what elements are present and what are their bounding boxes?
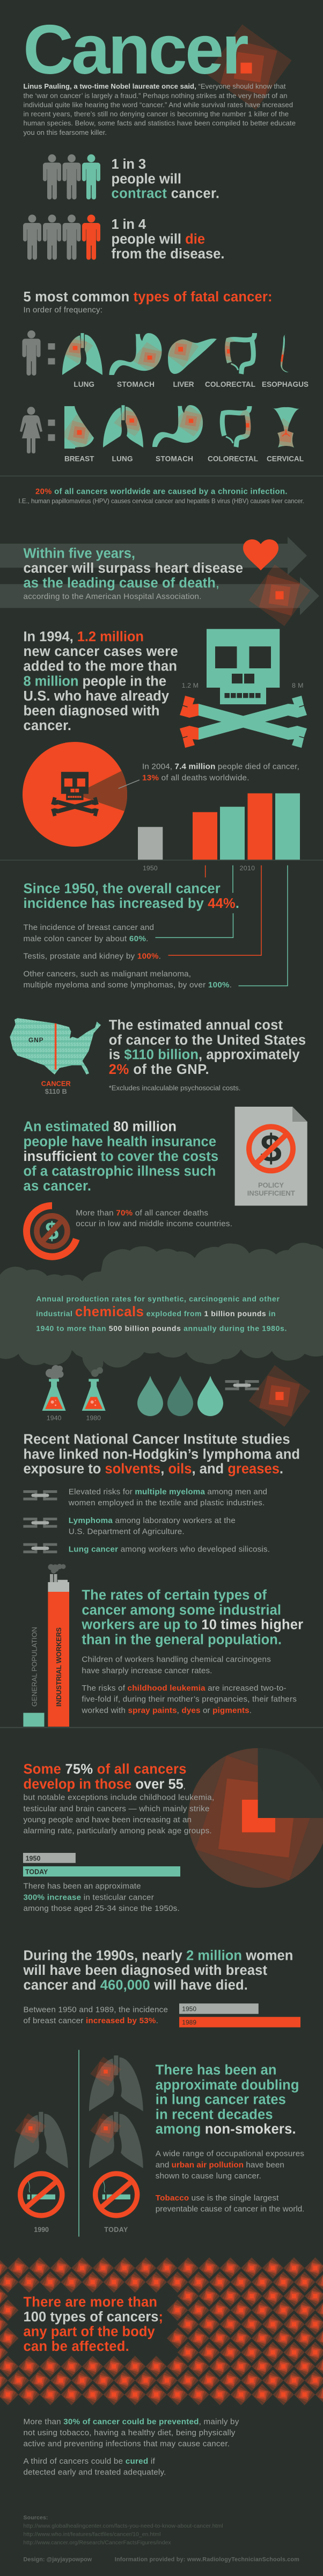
text: prevention and cure: not using tobacco, having a healthy diet, being physically [24, 2428, 236, 2437]
text: chemicals production [36, 1294, 287, 1332]
text: 1994 new cases: 8 million people in the [24, 674, 166, 689]
chart: factory bar vs general population: GENERAL POPULATION [31, 1627, 39, 1707]
icon: 70 percent ring with dollar: $ [45, 1217, 58, 1245]
text: chemicals production: Annual production rates for synthetic, carcinogenic and other [36, 1294, 280, 1303]
heading: 5 most common types [24, 290, 273, 315]
stat: 1 in 3 contract cancer: 1 in 3 [112, 157, 146, 172]
text: annual cost: is $110 billion, approximately [109, 1048, 300, 1063]
organ: female breast [64, 406, 94, 449]
list: elevated risks: Elevated risks for multiple myeloma among men and [69, 1488, 267, 1497]
sources [24, 2515, 223, 2546]
icon: insufficient policy document: POLICY [258, 1181, 284, 1189]
text: since 1950 incidence: male colon cancer by about 60%. [24, 934, 148, 943]
icon: skull and crossbones chart: 8 M [292, 682, 304, 689]
map: United States GNP: $$$$$$$$$$$$$$$$$$$$$$$$$$$$$$$$$$ [8, 1024, 105, 1030]
chart: 75 percent clock pie [182, 1746, 323, 1891]
heading: within five years: as the leading cause of death, [24, 576, 219, 591]
text: testicular increase: 300% increase in testicular cancer [24, 1893, 154, 1902]
text: since 1950 incidence: The incidence of breast cancer and [24, 923, 154, 932]
text: annual cost: *Excludes incalculable psychosocial costs. [109, 1084, 240, 1092]
text: National Cancer Institute: have linked non-Hodgkin’s lymphoma and [24, 1447, 300, 1462]
icon: flask 1940: 1940 [47, 1414, 61, 1422]
female organ labels: COLORECTAL [208, 455, 258, 463]
icon: tumor squares behind title [206, 24, 292, 110]
text: breast cancer 1990s: cancer and 460,000 will have died. [24, 1978, 248, 1993]
icon: 70 percent ring with dollar [27, 1206, 76, 1257]
stat: 1 in 3 contract cancer: people will [112, 171, 181, 186]
text: 80 million insufficient insurance: as cancer. [24, 1179, 91, 1194]
heading: 5 most common types: 5 most common types of fatal cancer: [24, 290, 273, 305]
arrow: lower band [0, 577, 319, 615]
female organ labels: LUNG [112, 455, 133, 463]
text: prevention and cure [24, 2417, 239, 2477]
text: 80 million insufficient insurance [24, 1120, 218, 1194]
icon: man [23, 330, 41, 376]
text: 75 percent over 55: young people and have been increasing at an [24, 1815, 192, 1824]
text: lung cancer doubling: preventable cause of cancer in the world. [156, 2205, 304, 2214]
text: National Cancer Institute [24, 1432, 300, 1477]
bar chart: incidence 1950 to 2010 [0, 793, 323, 872]
icon: lungs 1990 [14, 2112, 68, 2168]
male organ labels: STOMACH [117, 380, 155, 388]
sources: http://www.globalhealingcenter.com/facts-you-need-to-know-about-cancer.html [24, 2523, 223, 2529]
icon: flask 1980 [82, 1367, 106, 1422]
list: elevated risks: U.S. Department of Agriculture. [69, 1527, 185, 1536]
icon: tumor [249, 1365, 310, 1427]
callout: chronic infection [18, 487, 304, 505]
credits: Design: @jayjaypowpow [24, 2556, 92, 2563]
stat: 1 in 4 die: people will die [112, 232, 205, 247]
icon: 1 in 4 people [23, 215, 100, 260]
map: United States GNP: $$$$$$$$$$$$$$$$$$$$$$$$$$$$$$$$$$ [8, 1018, 105, 1024]
text: since 1950 incidence: Since 1950, the overall cancer [24, 881, 221, 896]
credits [24, 2556, 299, 2563]
text: lung cancer doubling: A wide range of occupational exposures [156, 2149, 304, 2158]
text: 2004 deaths: 13% of all deaths worldwide. [142, 773, 249, 782]
icon: two squares male [48, 343, 55, 364]
text: 80 million insufficient insurance: people have health insurance [24, 1134, 216, 1149]
text: lung cancer doubling: in lung cancer rates [156, 2092, 286, 2108]
text: lung cancer doubling: Tobacco use is the single largest [156, 2193, 279, 2203]
bar chart: breast cancer incidence: 1950 [182, 2005, 196, 2012]
icon: chain link [225, 1380, 259, 1390]
icon: skull and crossbones chart: 1.2 M [182, 682, 199, 689]
map: United States GNP: CANCER [41, 1080, 71, 1088]
text: 1994 new cases: new cancer cases were [24, 644, 178, 659]
male organ labels: LIVER [173, 380, 194, 388]
icon: no smoking 1990 [20, 2174, 62, 2216]
text: industrial workers rates: workers are up to 10 times higher [81, 1618, 303, 1633]
bar chart: testicular cancer: TODAY [25, 1868, 48, 1875]
female organ labels: BREAST [64, 455, 94, 463]
text: breast cancer 1990s: During the 1990s, nearly 2 million women [24, 1948, 293, 1963]
text: 75 percent over 55: alarming rate, particularly among peak age groups. [24, 1827, 212, 1836]
arrow: upper band [0, 537, 307, 575]
labels: 1990 and today [34, 2226, 128, 2233]
text: 1994 new cases [24, 629, 178, 733]
list: elevated risks [23, 1488, 270, 1554]
icon: flask 1980: 1980 [86, 1414, 101, 1422]
map: United States GNP: $$$$$$$$$$$$$$$$$$$$$$$$$$$$$$$$$$ [8, 1065, 105, 1071]
map: United States GNP: GNP [28, 1036, 43, 1044]
stat: 1 in 4 die [112, 217, 224, 262]
text: 1994 new cases: cancer. [24, 718, 71, 733]
chart: factory bar vs general population: INDUSTRIAL WORKERS [55, 1627, 63, 1707]
text: National Cancer Institute: Recent National Cancer Institute studies [24, 1432, 290, 1447]
icon: flask 1940 [42, 1365, 66, 1422]
text: 100 types of cancer [24, 2294, 163, 2354]
text: industrial workers rates: cancer among some industrial [82, 1603, 281, 1618]
icon: three drops [137, 1376, 223, 1416]
pie chart: deaths worldwide [23, 742, 140, 847]
text: 1994 new cases: U.S. who have already [24, 689, 170, 704]
text: prevention and cure: A third of cancers could be cured if [24, 2457, 155, 2466]
text: 75 percent over 55: testicular and brain cancers — which mainly strike [24, 1804, 209, 1813]
text: breast cancer 1990s: Between 1950 and 1989, the incidence [24, 2005, 168, 2014]
organ: male esophagus [281, 334, 289, 372]
organ: male liver [168, 338, 217, 374]
pattern: tumor field [0, 2257, 323, 2405]
text: breast cancer 1990s [23, 1948, 293, 2025]
text: prevention and cure: detected early and treated adequately. [24, 2468, 166, 2477]
labels: 1990 and today: TODAY [104, 2226, 128, 2233]
heading: 5 most common types: In order of frequency: [24, 306, 102, 315]
text: lung cancer doubling: There has been an [156, 2063, 277, 2078]
stat: 1 in 3 contract cancer: contract cancer. [112, 186, 219, 201]
map: United States GNP: $$$$$$$$$$$$$$$$$$$$$$$$$$$$$$$$$$ [8, 1059, 105, 1065]
text: since 1950 incidence: Testis, prostate and kidney by 100%. [24, 951, 161, 961]
icon: woman [20, 407, 42, 453]
labels: 1990 and today: 1990 [34, 2226, 49, 2233]
icon: no smoking today [96, 2174, 137, 2216]
bar chart: incidence 1950 to 2010: 1950 [143, 864, 158, 872]
bar chart: breast cancer incidence: 1989 [182, 2018, 196, 2026]
cloud: chemical smog [0, 1243, 323, 1376]
text: annual cost [109, 1018, 306, 1092]
text: lung cancer doubling: among non-smokers. [156, 2122, 296, 2137]
text: 70 percent of deaths: occur in low and middle income countries. [76, 1220, 232, 1229]
icon: tumor on arrow [249, 565, 310, 626]
heading: within five years: Within five years, [24, 546, 135, 561]
female organ labels: STOMACH [156, 455, 193, 463]
icon: lungs today lower [89, 2112, 143, 2168]
stat: 1 in 4 die: from the disease. [112, 247, 224, 262]
organ: male stomach [109, 333, 162, 375]
heading: within five years: according to the American Hospital Association. [24, 592, 202, 601]
icon: two squares female [48, 420, 55, 441]
map: United States GNP: $$$$$$$$$$$$$$$$$$$$$$$$$$$$$$$$$$ [8, 1036, 105, 1042]
text: 100 types of cancer: can be affected. [24, 2339, 129, 2354]
text: 100 types of cancer: 100 types of cancers; [24, 2310, 163, 2325]
intro text: Linus Pauling, a two-time Nobel laureate once said, “Everyone should know that [24, 82, 286, 90]
text: 100 types of cancer: There are more than [24, 2294, 157, 2310]
text: chemicals production: 1940 to more than 500 billion pounds annually during the 1980s. [36, 1324, 287, 1332]
text: industrial workers rates: Children of workers handling chemical carcinogens [82, 1655, 271, 1664]
text: testicular increase: among those aged 25-34 since the 1950s. [24, 1904, 180, 1913]
text: 75 percent over 55: Some 75% of all cancers [24, 1762, 186, 1777]
text: annual cost: of cancer to the United States [109, 1033, 306, 1048]
map: United States GNP [8, 1015, 105, 1095]
sources: http://www.cancer.org/Research/CancerFactsFigures/index [24, 2540, 171, 2546]
female organ labels: CERVICAL [267, 455, 304, 463]
text: industrial workers rates [81, 1588, 303, 1715]
text: 75 percent over 55: but notable exceptions include childhood leukemia, [24, 1793, 214, 1802]
icon: skull and crossbones chart [180, 629, 307, 748]
credits: Information provided by: www.RadiologyTechnicianSchools.com [115, 2556, 299, 2563]
text: 100 types of cancer: any part of the body [24, 2324, 156, 2339]
map: United States GNP: $$$$$$$$$$$$$$$$$$$$$$$$$$$$$$$$$$ [8, 1071, 105, 1077]
male organ labels: ESOPHAGUS [262, 380, 309, 388]
icon: 1 in 3 people [43, 154, 100, 199]
organ: female stomach [152, 405, 208, 447]
text: 2004 deaths [142, 762, 299, 782]
organ: female lung [103, 405, 143, 448]
text: since 1950 incidence: incidence has increased by 44%. [24, 896, 239, 911]
organ: male lung [62, 333, 102, 375]
heading: within five years: cancer will surpass heart disease [24, 561, 243, 576]
text: 80 million insufficient insurance: insufficient to cover the costs [24, 1149, 218, 1164]
text: industrial workers rates: worked with spray paints, dyes or pigments. [81, 1706, 252, 1715]
text: since 1950 incidence: Other cancers, such as malignant melanoma, [24, 969, 191, 978]
intro text: in recent years, there’s still no denying cancer is becoming the number 1 killer of the [24, 110, 289, 118]
list: elevated risks: Lymphoma among laboratory workers at the [69, 1516, 236, 1525]
organ: female cervical [273, 407, 300, 448]
icon: insufficient policy document [235, 1107, 307, 1206]
callout: chronic infection: I.E., human papillomavirus (HPV) causes cervical cancer and hepatitis B virus (HBV) causes liver cancer. [18, 498, 304, 505]
icon: lungs today upper [89, 2055, 143, 2111]
text: breast cancer 1990s: will have been diagnosed with breast [23, 1963, 267, 1978]
text: 1994 new cases: been diagnosed with [24, 703, 160, 718]
text: industrial workers rates: The risks of childhood leukemia are increased two-to- [82, 1684, 287, 1693]
text: lung cancer doubling: approximate doubling [156, 2077, 299, 2092]
text: prevention and cure: active and preventing infections that may cause cancer. [24, 2439, 230, 2448]
text: chemicals production: industrial chemicals exploded from 1 billion pounds in [36, 1304, 276, 1319]
bar chart: breast cancer incidence [179, 2003, 300, 2027]
text: National Cancer Institute: exposure to solvents, oils, and greases. [24, 1462, 283, 1477]
male organ labels: LUNG [74, 380, 94, 388]
text: 80 million insufficient insurance: An estimated 80 million [24, 1120, 177, 1135]
text: testicular increase: There has been an approximate [24, 1882, 141, 1891]
icon: insufficient policy document: INSUFFICIENT [247, 1189, 295, 1197]
text: testicular increase [24, 1882, 180, 1913]
intro text: individual quite like hearing the word “cancer.” And while survival rates have increased [24, 100, 293, 109]
divider: 1990 vs today line [78, 2050, 79, 2236]
text: since 1950 incidence: multiple myeloma and some lymphomas, by over 100%. [24, 980, 232, 990]
bar chart: testicular cancer: 1950 [26, 1855, 40, 1862]
text: industrial workers rates: five-fold if, during their mother’s pregnancies, their fathers [82, 1695, 297, 1704]
intro text: you on this fearsome killer. [24, 128, 107, 136]
text: prevention and cure: More than 30% of cancer could be prevented, mainly by [24, 2417, 239, 2426]
text: annual cost: 2% of the GNP. [109, 1062, 209, 1077]
icon: insufficient policy document: $ [260, 1127, 282, 1170]
intro text [24, 82, 296, 136]
male organ labels [74, 380, 309, 388]
text: breast cancer 1990s: of breast cancer increased by 53%. [24, 2016, 158, 2025]
map: United States GNP: $$$$$$$$$$$$$$$$$$$$$$$$$$$$$$$$$$ [8, 1042, 105, 1048]
sources: Sources: [24, 2515, 48, 2521]
map: United States GNP: $$$$$$$$$$$$$$$$$$$$$$$$$$$$$$$$$$ [8, 1048, 105, 1054]
list: elevated risks: Lung cancer among workers who developed silicosis. [69, 1545, 270, 1554]
icon: title full stop [240, 63, 252, 74]
list: elevated risks: women employed in the textile and plastic industries. [68, 1498, 265, 1507]
text: 75 percent over 55: develop in those over 55, [24, 1777, 186, 1792]
intro text: human species. Below, some facts and statistics have been compiled to better educate [24, 119, 296, 127]
leader lines from bars [156, 865, 288, 986]
text: 1994 new cases: In 1994, 1.2 million [24, 629, 144, 644]
text: 80 million insufficient insurance: of a catastrophic illness such [24, 1164, 216, 1179]
organ: male colorectal [225, 333, 257, 374]
bar chart: incidence 1950 to 2010: 2010 [239, 864, 255, 872]
text: lung cancer doubling [156, 2063, 304, 2214]
text: 2004 deaths: In 2004, 7.4 million people died of cancer, [142, 762, 299, 771]
text: 75 percent over 55 [24, 1762, 214, 1836]
chart: factory bar vs general population [23, 1564, 69, 1727]
text: industrial workers rates: than in the general population. [82, 1632, 282, 1647]
text: lung cancer doubling: in recent decades [156, 2107, 273, 2122]
text: 70 percent of deaths: More than 70% of all cancer deaths [76, 1208, 208, 1217]
stat: 1 in 3 contract cancer [112, 157, 219, 201]
bar chart: testicular cancer [23, 1853, 180, 1877]
text: since 1950 incidence [24, 881, 239, 990]
map: United States GNP: $$$$$$$$$$$$$$$$$$$$$$$$$$$$$$$$$$ [8, 1054, 105, 1059]
male organ labels: COLORECTAL [205, 380, 255, 388]
stat: 1 in 4 die: 1 in 4 [112, 217, 146, 232]
text: annual cost: The estimated annual cost [109, 1018, 283, 1033]
sources: http://www.who.int/features/factfiles/cancer/10_en.html [24, 2532, 160, 2538]
text: 1994 new cases: added to the more than [24, 659, 177, 674]
text: lung cancer doubling: shown to cause lung cancer. [156, 2171, 261, 2181]
organ: female colorectal [220, 406, 252, 448]
icon: heart [243, 539, 278, 571]
title: Cancer [23, 10, 248, 89]
intro text: the ‘war on cancer’ is largely a fraud.” Perhaps nothing strikes at the very heart of an [24, 91, 288, 99]
text: industrial workers rates: have sharply increase cancer rates. [82, 1666, 212, 1675]
callout: chronic infection: 20% of all cancers worldwide are caused by a chronic infection. [35, 487, 288, 496]
text: industrial workers rates: The rates of certain types of [82, 1588, 267, 1603]
heading: within five years [24, 546, 243, 601]
text: lung cancer doubling: and urban air pollution have been [156, 2160, 284, 2169]
map: United States GNP: $110 B [45, 1087, 67, 1095]
text: 70 percent of deaths [76, 1208, 232, 1229]
female organ labels [64, 455, 304, 463]
map: United States GNP: $$$$$$$$$$$$$$$$$$$$$$$$$$$$$$$$$$ [8, 1030, 105, 1036]
